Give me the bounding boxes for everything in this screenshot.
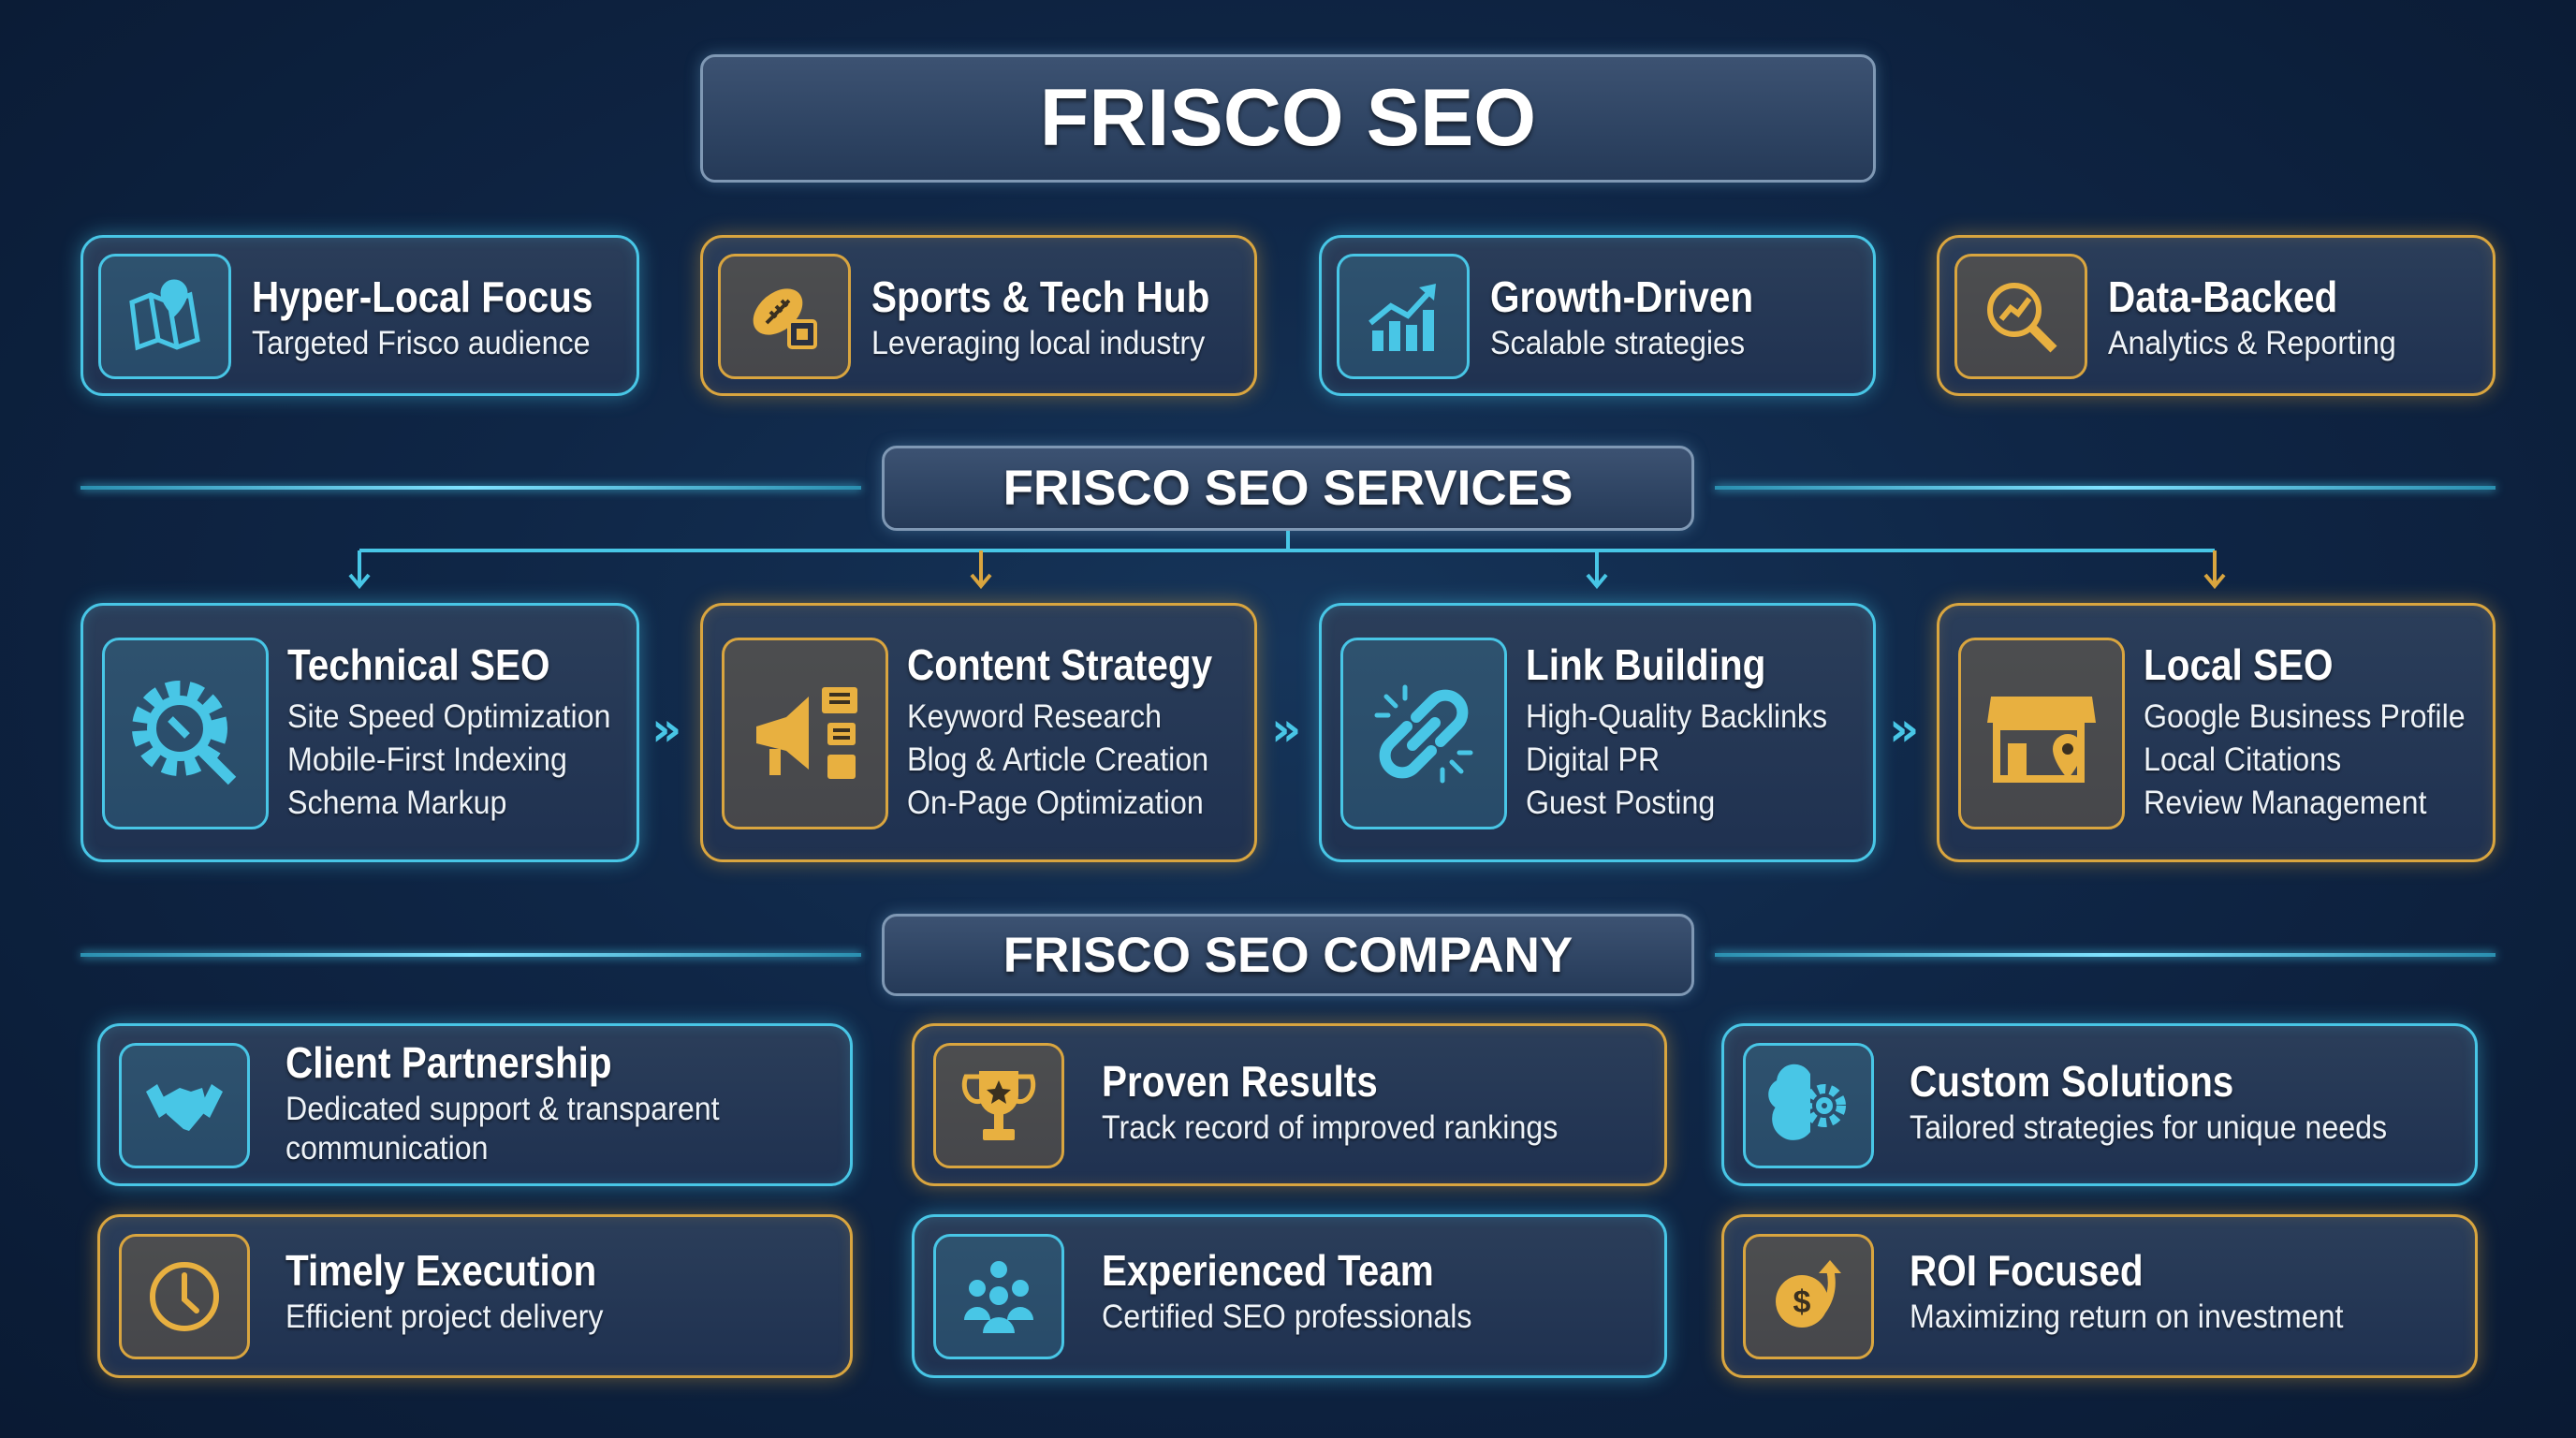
title text: Experienced Team bbox=[1102, 1246, 1434, 1295]
card: Proven Results bbox=[912, 1023, 1667, 1186]
subtitle: Leveraging local industry bbox=[871, 325, 1205, 361]
card: Link Building bbox=[1319, 603, 1876, 862]
card: Data-Backed bbox=[1937, 235, 2496, 396]
title text: Content Strategy bbox=[907, 640, 1212, 689]
card: ROI Focused bbox=[1721, 1214, 2478, 1378]
title text: Hyper-Local Focus bbox=[252, 272, 593, 321]
icon: clock bbox=[119, 1234, 250, 1359]
icon: chain link bbox=[1340, 638, 1507, 829]
title text: Proven Results bbox=[1102, 1057, 1378, 1106]
list: Keyword Research bbox=[907, 698, 1162, 735]
subtitle: Maximizing return on investment bbox=[1910, 1299, 2344, 1335]
icon: storefront bbox=[1958, 638, 2125, 829]
title text: Client Partnership bbox=[285, 1038, 612, 1087]
list: Google Business Profile bbox=[2144, 698, 2466, 735]
subtitle: Targeted Frisco audience bbox=[252, 325, 591, 361]
title text: Custom Solutions bbox=[1910, 1057, 2233, 1106]
card: Hyper-Local Focus bbox=[80, 235, 639, 396]
subtitle: Certified SEO professionals bbox=[1102, 1299, 1472, 1335]
title bbox=[700, 54, 1876, 183]
icon: trophy bbox=[933, 1043, 1064, 1168]
icon: dollar arrow bbox=[1743, 1234, 1874, 1359]
list: Mobile-First Indexing bbox=[287, 741, 567, 778]
chevron: » bbox=[1271, 702, 1301, 756]
list: Review Management bbox=[2144, 785, 2426, 821]
chevron: » bbox=[651, 702, 681, 756]
title text: ROI Focused bbox=[1910, 1246, 2144, 1295]
list: Local Citations bbox=[2144, 741, 2341, 778]
services header: FRISCO SEO SERVICES bbox=[1003, 461, 1573, 516]
list: High-Quality Backlinks bbox=[1526, 698, 1827, 735]
connector arrows bbox=[348, 531, 2226, 589]
list bbox=[1526, 698, 1827, 824]
card: Experienced Team bbox=[912, 1214, 1667, 1378]
subtitle bbox=[285, 1091, 720, 1167]
card: Content Strategy bbox=[700, 603, 1257, 862]
icon: megaphone bbox=[722, 638, 888, 829]
subtitle: Scalable strategies bbox=[1490, 325, 1745, 361]
card: Client Partnership bbox=[97, 1023, 853, 1186]
title text: Growth-Driven bbox=[1490, 272, 1753, 321]
subtitle: Track record of improved rankings bbox=[1102, 1109, 1558, 1146]
subtitle: Dedicated support & transparent bbox=[285, 1091, 720, 1127]
title text: Timely Execution bbox=[285, 1246, 596, 1295]
card: Growth-Driven bbox=[1319, 235, 1876, 396]
list bbox=[287, 698, 610, 824]
subtitle: Tailored strategies for unique needs bbox=[1910, 1109, 2387, 1146]
subtitle: communication bbox=[285, 1130, 489, 1167]
list: Site Speed Optimization bbox=[287, 698, 610, 735]
card: Timely Execution bbox=[97, 1214, 853, 1378]
card: Technical SEO bbox=[80, 603, 639, 862]
icon: team bbox=[933, 1234, 1064, 1359]
chevron: » bbox=[1889, 702, 1919, 756]
services header bbox=[882, 446, 1694, 531]
card: Local SEO bbox=[1937, 603, 2496, 862]
list: Blog & Article Creation bbox=[907, 741, 1208, 778]
list: Digital PR bbox=[1526, 741, 1660, 778]
title text: Link Building bbox=[1526, 640, 1765, 689]
title: FRISCO SEO bbox=[1040, 73, 1536, 163]
title text: Data-Backed bbox=[2108, 272, 2337, 321]
list: Guest Posting bbox=[1526, 785, 1715, 821]
list bbox=[2144, 698, 2466, 824]
list: On-Page Optimization bbox=[907, 785, 1204, 821]
subtitle: Efficient project delivery bbox=[285, 1299, 603, 1335]
company header: FRISCO SEO COMPANY bbox=[1003, 927, 1573, 983]
card: Sports & Tech Hub bbox=[700, 235, 1257, 396]
icon: brain gear bbox=[1743, 1043, 1874, 1168]
list: Schema Markup bbox=[287, 785, 506, 821]
subtitle: Analytics & Reporting bbox=[2108, 325, 2396, 361]
list bbox=[907, 698, 1208, 824]
icon: map pin bbox=[98, 254, 231, 379]
icon: magnifier chart bbox=[1954, 254, 2087, 379]
card: Custom Solutions bbox=[1721, 1023, 2478, 1186]
title text: Sports & Tech Hub bbox=[871, 272, 1209, 321]
icon: football chip bbox=[718, 254, 851, 379]
icon: dollar arrow: $ bbox=[1793, 1284, 1811, 1320]
company header bbox=[882, 914, 1694, 996]
icon: handshake bbox=[119, 1043, 250, 1168]
title text: Local SEO bbox=[2144, 640, 2333, 689]
title text: Technical SEO bbox=[287, 640, 549, 689]
icon: chart bbox=[1337, 254, 1470, 379]
icon: gear magnifier bbox=[102, 638, 269, 829]
